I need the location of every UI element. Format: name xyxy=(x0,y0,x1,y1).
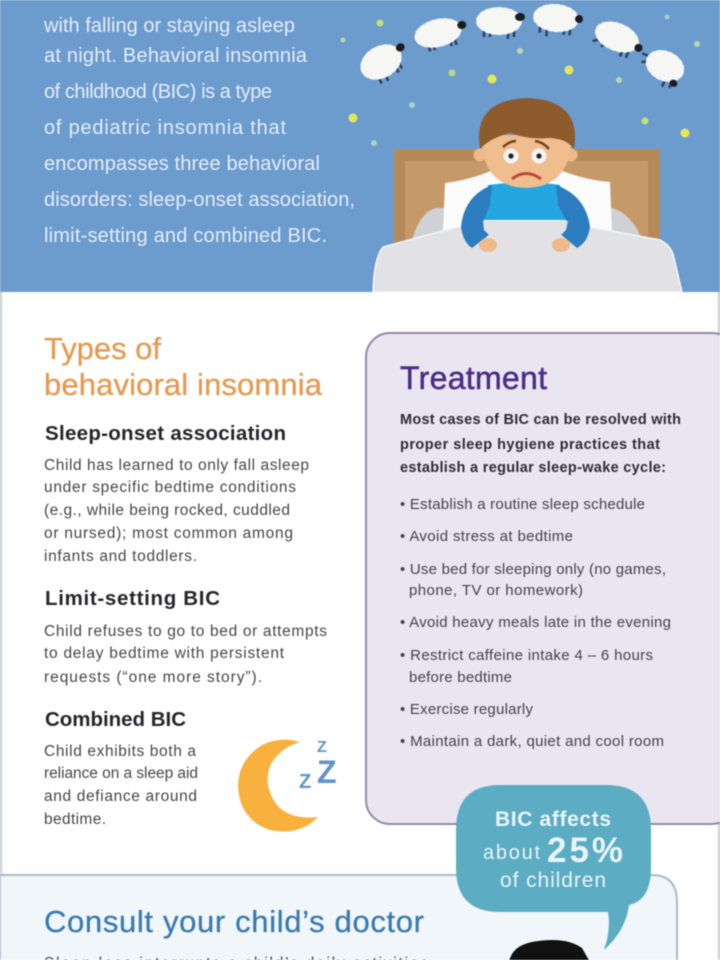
icon: moon and z's: Z xyxy=(317,739,327,756)
sleep-onset association: or nursed); most common among xyxy=(44,525,293,542)
panel: treatment xyxy=(366,333,720,824)
combined BIC: Combined BIC xyxy=(45,708,186,731)
treatment list: • Establish a routine sleep schedule xyxy=(400,496,645,513)
panel: consult your child's doctor xyxy=(0,875,677,960)
combined BIC xyxy=(44,708,198,828)
consult heading: Consult your child’s doctor xyxy=(44,904,424,939)
heading: behavioral insomnia xyxy=(44,367,323,402)
headboard xyxy=(394,149,660,251)
blanket fold xyxy=(483,221,568,252)
callout: BIC affects about 25%: 25% xyxy=(547,831,623,870)
right sleeve xyxy=(556,185,590,248)
treatment intro xyxy=(400,412,681,476)
left sleeve xyxy=(461,185,492,248)
heading: Types of xyxy=(44,331,161,366)
limit-setting BIC xyxy=(44,587,327,686)
combined BIC: reliance on a sleep aid xyxy=(44,765,198,782)
limit-setting BIC: to delay bedtime with persistent xyxy=(44,645,285,662)
sheep 1 xyxy=(357,36,416,89)
treatment list: • Use bed for sleeping only (no games, xyxy=(400,561,666,578)
treatment list: phone, TV or homework) xyxy=(409,582,583,599)
intro text: with falling or staying asleep xyxy=(43,15,295,37)
heading xyxy=(44,331,323,402)
sleep-onset association: (e.g., while being rocked, cuddled xyxy=(44,502,290,519)
bed and boy illustration xyxy=(373,98,682,292)
intro text: of pediatric insomnia that xyxy=(44,117,286,139)
treatment intro: Most cases of BIC can be resolved with xyxy=(400,412,681,428)
white pillow xyxy=(443,170,612,232)
treatment list: • Restrict caffeine intake 4 – 6 hours xyxy=(400,647,653,664)
header panel xyxy=(0,0,720,292)
sheep 3 xyxy=(478,9,525,39)
blanket xyxy=(373,227,682,292)
treatment list: • Avoid heavy meals late in the evening xyxy=(400,614,671,631)
sleep-onset association xyxy=(44,422,309,565)
sheep 6 xyxy=(633,43,688,92)
sheep 4 xyxy=(533,4,584,39)
panel: types of behavioral insomnia xyxy=(44,331,327,828)
treatment intro: proper sleep hygiene practices that xyxy=(400,437,660,453)
combined BIC: bedtime. xyxy=(44,811,106,828)
boy torso xyxy=(484,182,568,220)
treatment list: before bedtime xyxy=(409,669,512,686)
callout: BIC affects about 25%: BIC affects xyxy=(495,808,611,831)
sleep-onset association: Child has learned to only fall asleep xyxy=(44,457,309,474)
treatment heading: Treatment xyxy=(400,360,547,396)
intro text: of childhood (BIC) is a type xyxy=(44,81,272,103)
intro text xyxy=(43,15,355,247)
limit-setting BIC: Child refuses to go to bed or attempts xyxy=(44,623,327,640)
treatment list: • Avoid stress at bedtime xyxy=(400,528,573,545)
sleep-onset association: infants and toddlers. xyxy=(44,548,197,565)
intro text: limit-setting and combined BIC. xyxy=(44,225,327,247)
gray pillows xyxy=(412,208,642,240)
treatment list: • Maintain a dark, quiet and cool room xyxy=(400,733,664,750)
intro text: disorders: sleep-onset association, xyxy=(44,189,355,211)
icon: moon and z's: Z xyxy=(299,771,311,793)
sleep-onset association: under specific bedtime conditions xyxy=(44,479,296,496)
stars xyxy=(340,14,700,146)
callout: BIC affects about 25% xyxy=(456,785,651,950)
icon: moon and z's: Z xyxy=(317,754,337,790)
head xyxy=(474,98,578,188)
limit-setting BIC: requests (“one more story”). xyxy=(44,669,262,686)
sleep-onset association: Sleep-onset association xyxy=(45,422,286,445)
treatment intro: establish a regular sleep-wake cycle: xyxy=(400,460,666,476)
treatment list xyxy=(400,496,671,750)
limit-setting BIC: Limit-setting BIC xyxy=(45,587,220,610)
doctor hair xyxy=(509,940,590,960)
callout: BIC affects about 25%: about xyxy=(483,842,540,864)
sheep 5 xyxy=(591,18,647,63)
intro text: at night. Behavioral insomnia xyxy=(44,45,308,67)
hands xyxy=(479,238,570,252)
icon: moon and z's xyxy=(238,739,337,831)
sheep 2 xyxy=(414,14,470,54)
treatment list: • Exercise regularly xyxy=(400,701,534,718)
callout: BIC affects about 25%: of children xyxy=(500,869,606,892)
intro text: encompasses three behavioral xyxy=(44,153,320,175)
combined BIC: and defiance around xyxy=(44,788,197,805)
combined BIC: Child exhibits both a xyxy=(44,743,196,760)
